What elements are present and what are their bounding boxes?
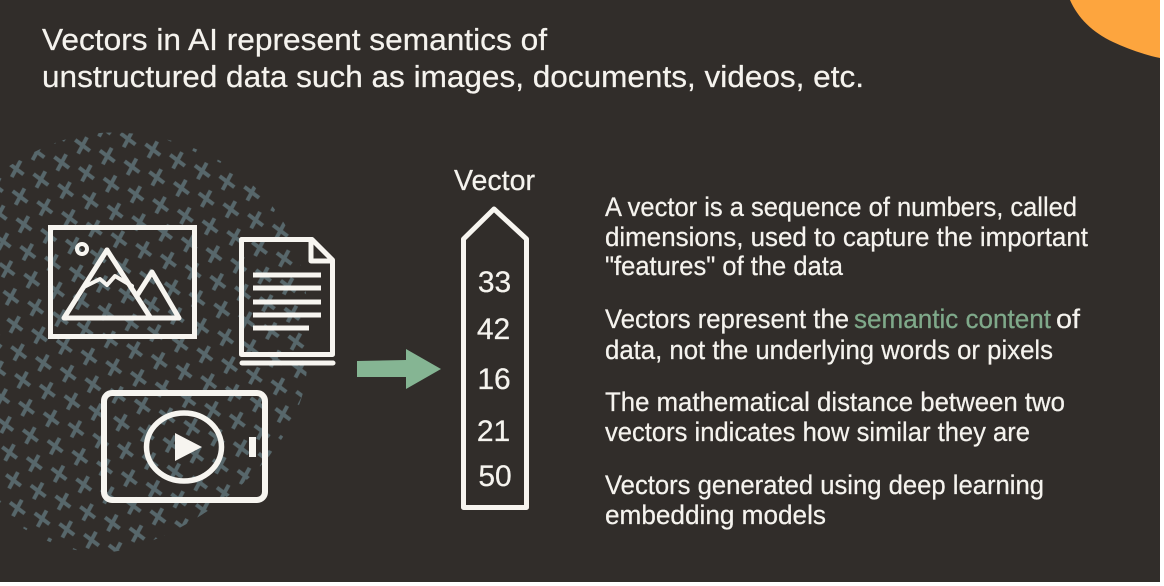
text block: definition: A vector is a sequence of numbers, called: [605, 192, 1077, 222]
decorative orange corner blob: [1070, 0, 1160, 58]
vector shape with numbers: [464, 209, 526, 508]
text block: definition: dimensions, used to capture the important: [605, 222, 1088, 252]
vector shape with numbers: 42: [477, 313, 510, 346]
vector label: Vector: [454, 165, 535, 197]
text block: distance: [605, 387, 1065, 447]
text block: embedding models: [605, 470, 1044, 530]
vector shape with numbers: 21: [477, 415, 510, 448]
icon: video player: [104, 393, 265, 500]
arrow: [357, 349, 441, 389]
text block: distance: The mathematical distance between two: [605, 387, 1065, 417]
icon: document: [242, 239, 333, 363]
title: unstructured data such as images, documents, videos, etc.: [42, 59, 864, 94]
text block: semantic content: of: [1056, 304, 1081, 334]
title: Vectors in AI represent semantics of: [42, 22, 547, 57]
text block: semantic content: data, not the underlying words or pixels: [605, 335, 1053, 365]
text block: distance: vectors indicates how similar they are: [605, 417, 1030, 447]
vector shape with numbers: 16: [477, 363, 511, 396]
text block: definition: "features" of the data: [605, 251, 844, 281]
vector shape with numbers: 50: [478, 460, 512, 493]
text block: semantic content: [605, 304, 1081, 365]
text block: embedding models: Vectors generated using deep learning: [605, 470, 1044, 500]
patterned x blob: [0, 132, 309, 553]
text block: semantic content: semantic content: [854, 304, 1051, 334]
text block: definition: [605, 192, 1088, 281]
icon: image: [50, 228, 194, 336]
vector shape with numbers: 33: [478, 266, 511, 299]
text block: semantic content: Vectors represent the: [605, 304, 849, 334]
title: [42, 22, 864, 94]
text block: embedding models: embedding models: [605, 500, 826, 530]
